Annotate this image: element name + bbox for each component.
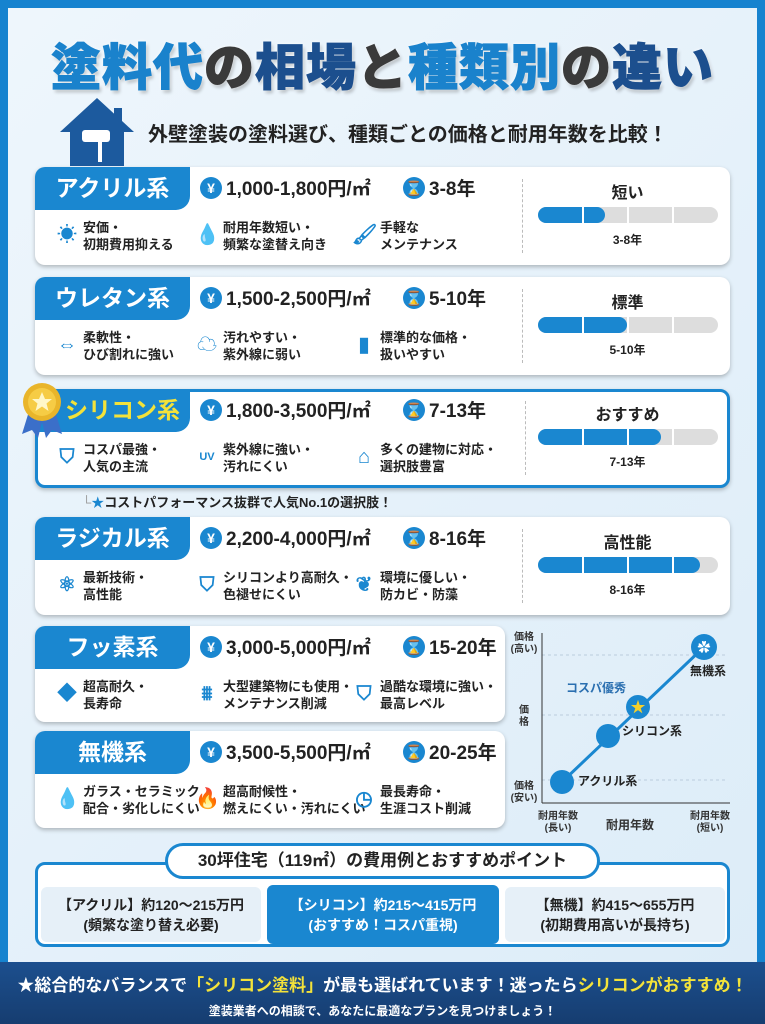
panel: acrylic: 耐用年数短い・ [223,220,314,235]
panel: inorganic: ◷ [355,788,373,810]
icon: house with roller [60,98,134,166]
panel: radical: 高性能 [83,587,122,602]
panel: radical: ラジカル系 [55,525,170,551]
panel: acrylic: 安価・ [83,220,122,235]
panel: acrylic: メンテナンス [380,237,458,252]
footer banner: ★総合的なバランスで「シリコン塗料」が最も選ばれています！迷ったらシリコンがおすすめ！ [17,976,748,995]
chart: price vs durability: アクリル系 [578,774,637,788]
panel: urethane: 汚れやすい・ [223,330,301,345]
panel: fluorine: ◆ [57,683,77,705]
panel: radical: ⌛ [405,530,423,546]
panel: inorganic: 生涯コスト削減 [380,801,471,816]
panel: fluorine: 大型建築物にも使用・ [223,679,353,694]
panel: silicone: 人気の主流 [83,459,148,474]
panel: silicone: ⌛ [405,402,423,418]
panel: silicone: おすすめ [595,407,660,424]
panel: fluorine: 長寿命 [83,696,122,711]
chart: price vs durability: (高い) [511,642,537,655]
panel: urethane [35,277,730,375]
chart: price vs durability: 価格 [514,630,534,643]
panel: silicone: 汚れにくい [223,459,288,474]
panel: inorganic: 配合・劣化しにくい [83,801,200,816]
note: └★コストパフォーマンス抜群で人気No.1の選択肢！ [82,495,392,510]
panel: radical: 8-16年 [429,529,486,550]
panel: fluorine: 3,000-5,000円/㎡ [226,638,371,659]
panel: urethane: ▮ [358,334,370,356]
panel: fluorine: 最高レベル [380,696,445,711]
chart: price vs durability: 耐用年数 [606,817,654,832]
panel: fluorine: 15-20年 [429,638,497,659]
panel: fluorine: ⌛ [405,639,423,655]
panel: inorganic: 20-25年 [429,743,497,764]
chart: price vs durability: コスパ優秀 [566,680,626,695]
panel: acrylic: 手軽な [380,220,419,235]
panel: fluorine [35,626,505,722]
panel: radical: ⚛ [58,574,76,596]
panel: radical: 高性能 [603,535,652,552]
panel: cost example: (おすすめ！コスパ重視) [308,917,458,933]
panel: fluorine: フッ素系 [66,634,158,660]
panel: cost example: 【無機】約415～655万円 [536,897,694,913]
panel: urethane: 紫外線に弱い [223,347,301,362]
panel: inorganic: 無機系 [78,739,147,765]
chart: price vs durability: シリコン系 [622,724,682,738]
panel: urethane: 5-10年 [429,289,486,310]
panel: acrylic: 🖌 [352,224,377,246]
panel: silicone [35,389,730,488]
panel: radical: シリコンより高耐久・ [223,570,353,585]
panel: silicone: 選択肢豊富 [380,459,445,474]
panel: urethane: 標準 [611,295,644,312]
panel: radical: 環境に優しい・ [380,570,471,585]
footer banner [0,962,765,1024]
panel: acrylic: 短い [611,185,644,202]
panel: fluorine: ¥ [207,639,215,655]
panel: inorganic: 🔥 [195,788,220,810]
chart: price vs durability [511,630,730,834]
panel: inorganic: 💧 [55,788,80,810]
heading: cost example [165,843,600,879]
icon: gold medal [22,383,62,438]
panel: acrylic: 1,000-1,800円/㎡ [226,179,371,200]
panel: silicone: 1,800-3,500円/㎡ [226,401,371,422]
panel: inorganic [35,731,505,828]
panel: silicone: 紫外線に強い・ [223,442,314,457]
panel: acrylic [35,167,730,265]
panel: radical: 2,200-4,000円/㎡ [226,529,371,550]
panel: radical: 色褪せにくい [223,587,301,602]
panel: inorganic: 3,500-5,500円/㎡ [226,743,371,764]
panel: radical: 最新技術・ [83,570,148,585]
panel: inorganic: 最長寿命・ [380,784,445,799]
panel: fluorine: 過酷な環境に強い・ [380,679,497,694]
panel: silicone: シリコン系 [65,397,180,423]
chart: price vs durability: ★ [630,699,646,716]
panel: silicone: 7-13年 [429,401,486,422]
panel: radical: ¥ [207,530,215,546]
panel: cost example: (頻繁な塗り替え必要) [83,917,219,933]
heading: cost example: 30坪住宅（119㎡）の費用例とおすすめポイント [198,851,567,870]
panel: silicone: 7-13年 [609,455,646,469]
panel: urethane: ☁ [197,334,217,356]
panel: urethane: 柔軟性・ [83,330,135,345]
panel: inorganic: 燃えにくい・汚れにくい [223,801,365,816]
chart: price vs durability: 耐用年数 [690,809,730,822]
panel: silicone: ¥ [207,402,215,418]
panel: acrylic: ¥ [207,180,215,196]
footer banner: 塗装業者への相談で、あなたに最適なプランを見つけましょう！ [209,1004,556,1018]
panel: cost example: (初期費用高いが長持ち) [540,917,690,933]
panel: inorganic: ¥ [207,744,215,760]
panel: fluorine: ⛉ [356,683,372,705]
panel: urethane: 標準的な価格・ [380,330,471,345]
panel: acrylic: 3-8年 [429,179,475,200]
panel: radical [35,517,730,615]
panel: acrylic: 頻繁な塗替え向き [223,237,327,252]
panel: acrylic: 💧 [195,224,220,246]
chart: price vs durability: 価 [519,703,529,716]
chart: price vs durability: 耐用年数 [538,809,578,822]
panel: inorganic: ⌛ [405,744,423,760]
panel: urethane: ¥ [207,290,215,306]
panel: radical: 防カビ・防藻 [380,587,458,602]
panel: acrylic: アクリル系 [56,175,169,201]
title: 塗料代の相場と種類別の違い [51,40,714,96]
panel: cost example [35,862,730,947]
panel: acrylic: 初期費用抑える [83,237,174,252]
chart: price vs durability: (安い) [511,791,537,804]
panel: urethane: ⇔ [57,334,77,356]
panel: silicone: UV [199,451,215,463]
panel: silicone: ⛉ [60,446,74,468]
chart: price vs durability: (長い) [545,822,571,834]
chart: price vs durability: 格 [519,715,529,728]
panel: cost example: 【アクリル】約120～215万円 [58,897,244,913]
panel: urethane: 1,500-2,500円/㎡ [226,289,371,310]
panel: urethane: ⌛ [405,290,423,306]
subtitle: 外壁塗装の塗料選び、種類ごとの価格と耐用年数を比較！ [148,124,668,146]
panel: fluorine: メンテナンス削減 [223,696,327,711]
chart: price vs durability: ✿ [697,640,711,655]
panel: urethane: 扱いやすい [380,347,445,362]
panel: inorganic: 超高耐候性・ [223,784,301,799]
chart: price vs durability: 価格 [514,779,534,792]
panel: urethane: ひび割れに強い [83,347,174,362]
panel: urethane: ウレタン系 [55,285,170,311]
panel: cost example: 【シリコン】約215～415万円 [290,897,476,913]
panel: urethane: 5-10年 [609,343,646,357]
chart: price vs durability: (短い) [697,821,723,834]
panel: silicone: コスパ最強・ [83,442,161,457]
panel: acrylic: 3-8年 [613,233,642,247]
panel: fluorine: 超高耐久・ [83,679,148,694]
panel: acrylic: ☀ [57,224,77,246]
panel: silicone: ⌂ [358,446,370,468]
panel: radical: 8-16年 [609,583,646,597]
panel: fluorine: ⩩ [202,683,212,705]
panel: inorganic: ガラス・セラミック [83,784,200,799]
panel: acrylic: ⌛ [405,180,423,196]
panel: radical: ❦ [356,574,372,596]
panel: silicone: 多くの建物に対応・ [380,442,497,457]
panel: radical: ⛉ [200,574,214,596]
chart: price vs durability: 無機系 [690,663,726,678]
